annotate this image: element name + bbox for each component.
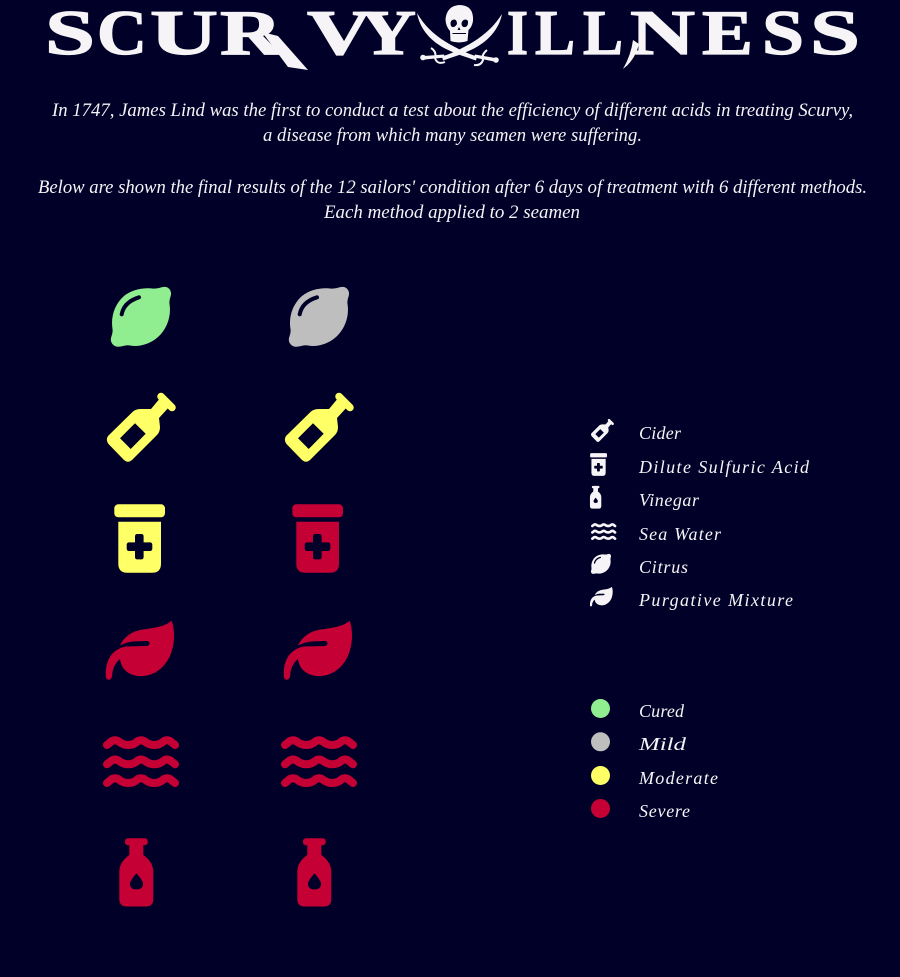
- swatch: severe: [591, 799, 610, 818]
- legend: condition: [591, 699, 718, 821]
- label: cider: Cider: [639, 423, 682, 443]
- title: [45, 0, 860, 70]
- icon: citrus: [591, 554, 611, 574]
- icon: purgative mixture, severe (second sailor): [284, 621, 352, 680]
- icon: cider: [591, 420, 613, 442]
- icon grid: sailor results: [106, 287, 353, 906]
- title flourishes: long R leg and N tail: [262, 32, 639, 70]
- icon: purgative mixture: [590, 587, 613, 607]
- label: dilute sulfuric acid: Dilute Sulfuric Acid: [638, 457, 810, 477]
- icon: vinegar, severe (second sailor): [297, 838, 331, 906]
- label: citrus: Citrus: [639, 557, 688, 577]
- icon: skull and crossed swords: [417, 5, 502, 65]
- icon: citrus, cured: [111, 287, 171, 347]
- swatch: mild: [591, 732, 610, 751]
- icon: dilute sulfuric acid, severe: [292, 504, 343, 573]
- icon: vinegar, severe: [119, 838, 153, 906]
- icon: vinegar: [590, 486, 601, 509]
- icon: sea water, severe: [107, 740, 175, 783]
- label: vinegar: Vinegar: [639, 490, 700, 510]
- swatch: cured: [591, 699, 610, 718]
- intro text: a disease from which many seamen were suffering.: [263, 125, 642, 146]
- icon: sea water, severe (second sailor): [285, 740, 353, 783]
- label: sea water: Sea Water: [639, 524, 722, 544]
- label: cured: Cured: [639, 701, 685, 721]
- label: moderate: Moderate: [638, 768, 718, 788]
- icon: purgative mixture, severe: [106, 621, 174, 680]
- icon: dilute sulfuric acid, moderate: [114, 504, 165, 573]
- legend: treatments: [590, 420, 810, 610]
- icon: citrus, mild: [289, 287, 349, 347]
- icon: cider, moderate: [107, 396, 172, 462]
- label: severe: Severe: [639, 801, 690, 821]
- label: mild: Mild: [638, 734, 687, 754]
- swatch: moderate: [591, 766, 610, 785]
- intro text: Each method applied to 2 seamen: [323, 202, 580, 223]
- icon: cider, moderate (second sailor): [285, 396, 350, 462]
- intro text: Below are shown the final results of the 12 sailors' condition after 6 days of treatment with 6 different methods.: [38, 177, 867, 198]
- label: purgative mixture: Purgative Mixture: [638, 590, 793, 610]
- icon: dilute sulfuric acid: [590, 453, 607, 476]
- icon: sea water: [592, 524, 615, 539]
- intro text: [38, 100, 867, 223]
- intro text: In 1747, James Lind was the first to conduct a test about the efficiency of different acids in treating Scurvy,: [51, 100, 853, 121]
